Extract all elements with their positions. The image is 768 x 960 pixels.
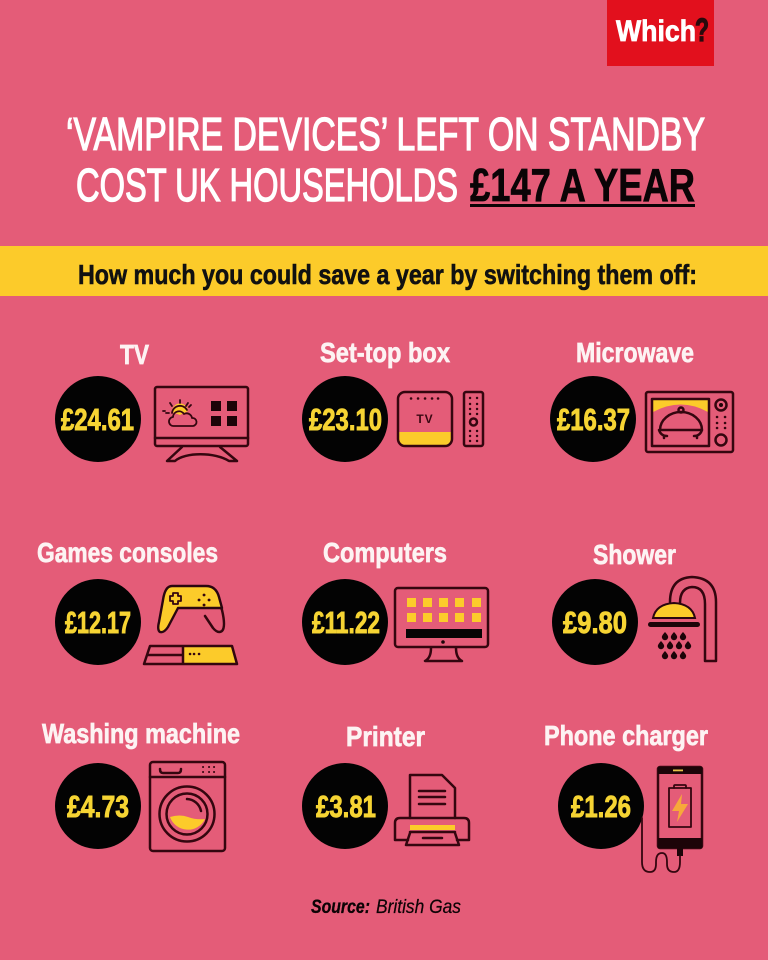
item: Computers (302, 537, 488, 665)
logo: Which?: Which (616, 15, 696, 48)
item: Microwave: £16.37 (557, 402, 630, 437)
item: Phone charger: £1.26 (571, 789, 631, 824)
item: Set-top box: £23.10 (309, 402, 382, 437)
item: Washing machine: Washing machine (42, 718, 240, 749)
item: Set-top box: Set-top box (320, 337, 450, 368)
logo: Which? (607, 0, 714, 66)
title: £147 A YEAR (470, 159, 695, 211)
source: Source: (311, 897, 370, 918)
icon: set-top box and remote (398, 392, 483, 446)
title (66, 108, 705, 211)
item: Computers: Computers (323, 537, 447, 568)
icon: games controller and console (144, 586, 237, 664)
item: Washing machine (42, 718, 240, 851)
subtitle band (0, 246, 768, 296)
source (311, 897, 461, 918)
icon: phone with charging cable (642, 767, 702, 872)
source: British Gas (376, 897, 461, 918)
item: Washing machine: £4.73 (67, 789, 129, 824)
item: Shower: Shower (593, 539, 676, 570)
icon: set-top box and remote: TV (416, 412, 434, 426)
item: Printer: Printer (346, 721, 425, 752)
title: COST UK HOUSEHOLDS (76, 159, 458, 211)
icon: printer (395, 775, 469, 845)
item: TV: TV (120, 339, 149, 370)
item: Computers: £11.22 (312, 605, 380, 640)
logo: Which?: ? (695, 12, 709, 48)
item: Microwave (550, 337, 733, 462)
item: Printer: £3.81 (316, 789, 376, 824)
item: Set-top box (302, 337, 483, 462)
item: TV (55, 339, 248, 462)
icon: computer monitor (395, 588, 488, 661)
item: Printer (302, 721, 469, 849)
icon: microwave (646, 392, 733, 452)
icon: television (155, 387, 248, 461)
item: Games consoles: £12.17 (65, 605, 131, 640)
item: Shower: £9.80 (563, 605, 627, 640)
icon: shower (648, 577, 716, 661)
item: Microwave: Microwave (576, 337, 694, 368)
item: TV: £24.61 (61, 402, 134, 437)
item: Games consoles: Games consoles (37, 537, 218, 568)
item: Shower (552, 539, 716, 665)
item: Phone charger (544, 720, 708, 872)
item: Games consoles (37, 537, 237, 665)
item: Phone charger: Phone charger (544, 720, 708, 751)
icon: washing machine (150, 762, 225, 851)
